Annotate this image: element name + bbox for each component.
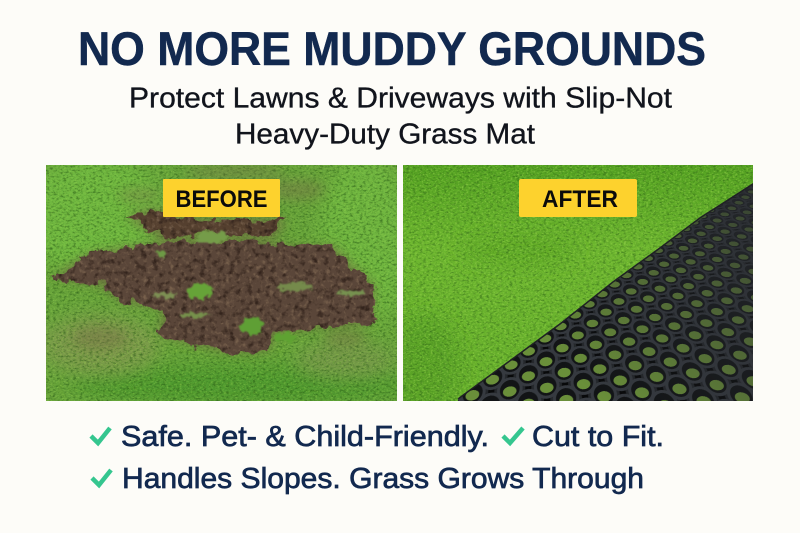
- benefit: slopes and grass growth: Handles Slopes. Grass Grows Through: [122, 463, 644, 495]
- mud patch: [53, 210, 375, 352]
- subtitle: Protect Lawns & Driveways with Slip-Not: [129, 82, 672, 114]
- benefit: cut to fit: Cut to Fit.: [532, 421, 664, 453]
- icon: check: [91, 428, 110, 443]
- after label: AFTER: [542, 186, 618, 213]
- before label: [163, 179, 280, 217]
- icon: check: [92, 470, 111, 485]
- subtitle: [129, 82, 672, 150]
- grass tufts within mud: [153, 231, 366, 343]
- mud surround: [55, 210, 373, 350]
- grass background: [46, 165, 397, 401]
- panel: before photo: [46, 165, 397, 401]
- rubber grass mat: [458, 183, 753, 401]
- panel: after photo lawn: [403, 165, 753, 401]
- icon: check: [503, 428, 523, 443]
- subtitle: Heavy-Duty Grass Mat: [235, 118, 535, 150]
- title: NO MORE MUDDY GROUNDS: [78, 23, 706, 76]
- before label: BEFORE: [176, 186, 268, 213]
- after label: [519, 179, 637, 217]
- bare soil haze: [72, 165, 367, 350]
- benefit: safe: Safe. Pet- & Child-Friendly.: [121, 421, 489, 453]
